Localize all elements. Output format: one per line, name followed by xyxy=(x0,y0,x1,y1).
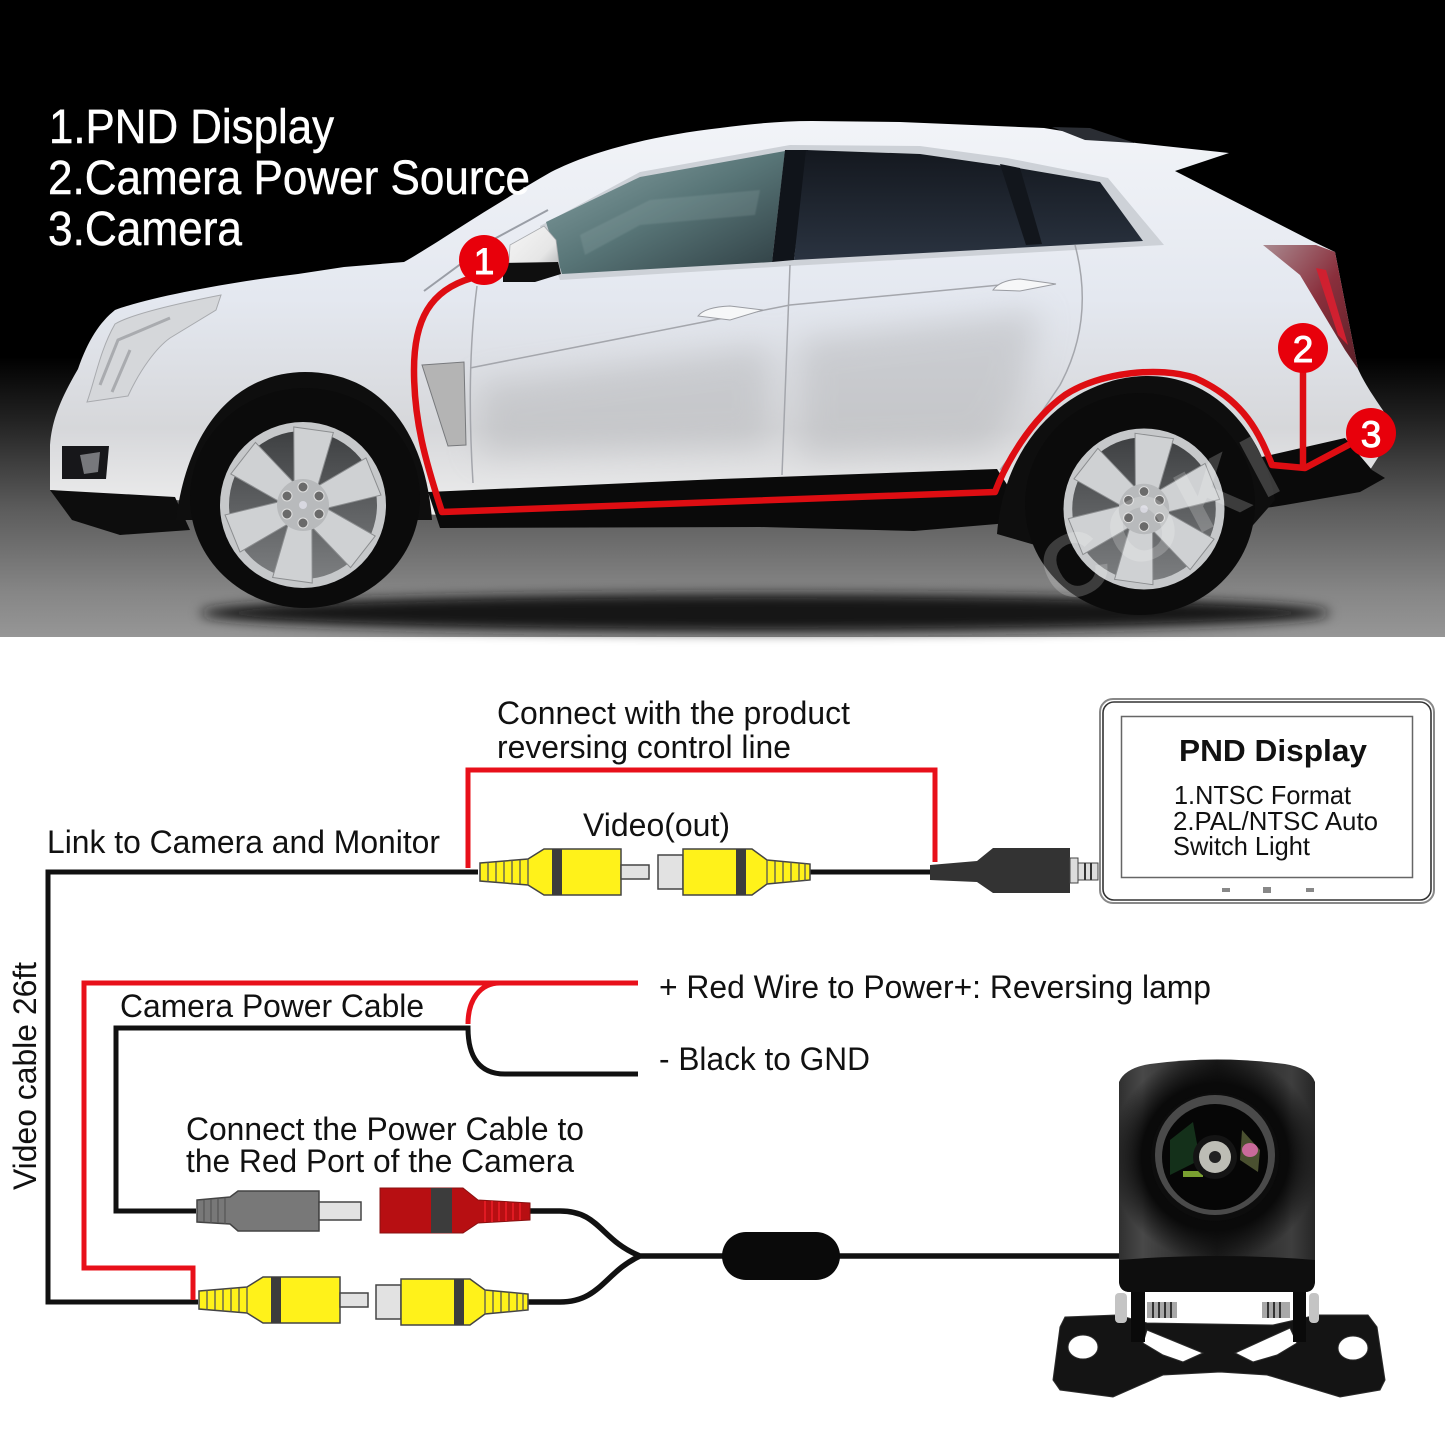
label: camera power cable: Camera Power Cable xyxy=(120,988,424,1024)
panel: car photo xyxy=(0,0,1445,637)
marker 2 xyxy=(1278,323,1328,373)
display plug xyxy=(930,848,1098,893)
rca female video top xyxy=(658,849,810,895)
video cable black xyxy=(48,872,478,1302)
label: red wire: + Red Wire to Power+: Reversing lamp xyxy=(659,969,1211,1005)
display features: Switch Light xyxy=(1173,831,1311,861)
roof rail xyxy=(1052,127,1135,143)
camera xyxy=(1053,1052,1385,1397)
rear window xyxy=(794,150,1143,260)
mount screws xyxy=(1115,1290,1319,1342)
label: video cable length: Video cable 26ft xyxy=(7,962,43,1190)
lens xyxy=(1151,1093,1279,1221)
camera y-split cable xyxy=(528,1211,1120,1302)
marker 2: 2 xyxy=(1293,329,1313,370)
label: connect power cable: Connect the Power Cable to xyxy=(186,1111,584,1147)
display features: 1.NTSC Format xyxy=(1174,780,1352,810)
label: product reversing line: reversing control line xyxy=(497,729,791,765)
windshield base line xyxy=(424,210,548,291)
window trim xyxy=(540,145,1164,280)
power red wire xyxy=(84,983,638,1300)
rear pillar xyxy=(1000,164,1042,245)
label: product reversing line xyxy=(497,695,850,765)
display title: PND Display xyxy=(1179,733,1368,768)
fender vent xyxy=(422,362,466,446)
rear wheel arch xyxy=(997,376,1275,545)
fog lamp highlight xyxy=(80,452,100,474)
rca female red xyxy=(380,1188,530,1233)
pillar xyxy=(772,150,808,262)
legend list: 3.Camera xyxy=(48,203,242,256)
label: product reversing line: Connect with the product xyxy=(497,695,850,731)
front window xyxy=(546,151,785,274)
label: link to camera: Link to Camera and Monitor xyxy=(47,824,440,860)
rca male video top xyxy=(480,849,649,895)
car body xyxy=(50,121,1395,515)
display buttons xyxy=(1222,887,1314,893)
legend list: 1.PND Display xyxy=(49,101,334,154)
marker 3: 3 xyxy=(1361,414,1381,455)
panel: wiring diagram xyxy=(7,695,1434,1397)
marker 1 xyxy=(459,235,509,285)
mirror base xyxy=(503,262,561,282)
red cable route xyxy=(414,278,1371,512)
photo backdrop xyxy=(0,0,1445,637)
rear bumper xyxy=(1240,438,1385,512)
mirror xyxy=(508,226,560,281)
side sill xyxy=(428,469,1030,531)
display features: 2.PAL/NTSC Auto xyxy=(1173,806,1378,836)
rear door handle xyxy=(993,279,1056,291)
label: video out: Video(out) xyxy=(583,807,730,843)
label: connect power cable xyxy=(186,1111,584,1179)
front wheel arch xyxy=(176,372,432,520)
PND display xyxy=(1100,699,1434,903)
reversing control red wire xyxy=(468,770,935,868)
inline box xyxy=(722,1232,840,1280)
tail lamp xyxy=(1263,245,1358,369)
display features xyxy=(1173,780,1378,861)
cable to display xyxy=(810,870,935,874)
display frame xyxy=(1100,699,1434,903)
door lines xyxy=(470,245,1082,483)
tail lamp stripe xyxy=(1316,268,1348,345)
housing lower band xyxy=(1119,1256,1315,1292)
window reflection xyxy=(580,190,760,255)
car illustration xyxy=(50,121,1395,615)
display screen xyxy=(1122,716,1412,878)
lower front bumper xyxy=(50,490,190,535)
marker 3 xyxy=(1346,408,1396,458)
watermark: COKI xyxy=(1022,418,1295,626)
headlamp xyxy=(87,295,221,402)
rca male grey xyxy=(197,1191,361,1231)
label: black wire: - Black to GND xyxy=(659,1041,870,1077)
display inner bezel xyxy=(1103,702,1431,900)
headlamp detail xyxy=(100,318,170,392)
ground shadow xyxy=(200,594,1330,632)
legend list xyxy=(48,101,530,256)
front tire xyxy=(190,388,420,608)
housing lens shadow xyxy=(1119,1060,1312,1252)
rca female video bottom xyxy=(376,1279,528,1325)
front door handle xyxy=(698,306,763,320)
power black wire xyxy=(116,1028,638,1211)
label: connect power cable: the Red Port of the Camera xyxy=(186,1143,574,1179)
body shading xyxy=(480,310,1040,458)
legend list: 2.Camera Power Source xyxy=(48,152,530,205)
marker 1: 1 xyxy=(474,241,494,282)
camera housing xyxy=(1119,1060,1315,1292)
rca male video bottom xyxy=(199,1277,368,1323)
front rim xyxy=(220,422,386,588)
rear tire xyxy=(1025,393,1255,615)
fog lamp xyxy=(62,446,109,479)
camera bracket xyxy=(1053,1315,1385,1397)
rear rim xyxy=(1063,428,1225,590)
